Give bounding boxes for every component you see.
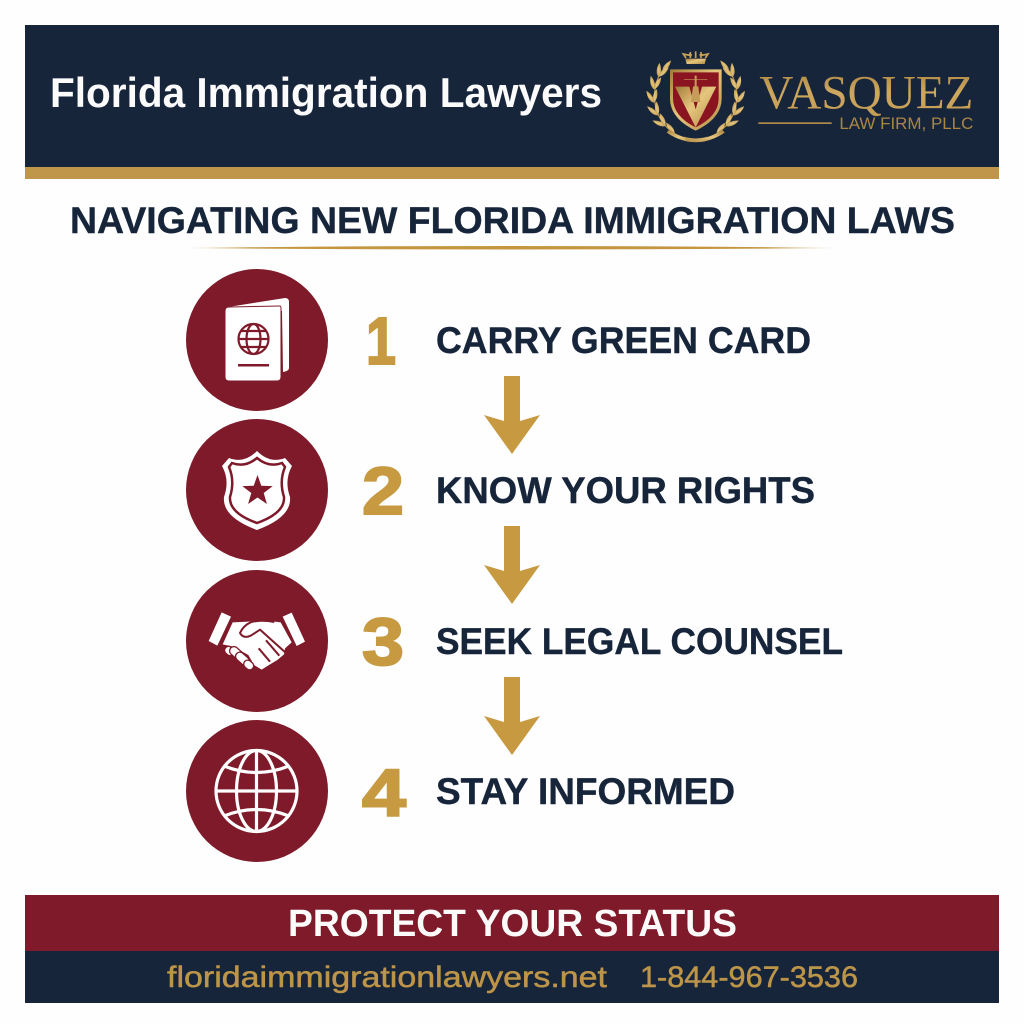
step 3 [186,570,843,712]
step 1 [186,269,811,411]
step number 4: 4 [362,756,406,831]
arrow 2 to 3 [484,526,540,604]
step 4 [186,720,735,862]
icon: handshake [186,570,328,712]
step label 4: STAY INFORMED [436,771,735,812]
icon: globe [186,720,328,862]
logo firm name: VASQUEZ [759,67,973,119]
logo shield [670,69,722,131]
firm logo [645,51,973,142]
header navy band [25,25,999,167]
footer red band [25,895,999,951]
header panel [25,25,999,179]
step label 2: KNOW YOUR RIGHTS [436,470,815,511]
step number 3: 3 [362,605,404,680]
logo subtitle: LAW FIRM, PLLC [839,114,973,133]
arrow 1 to 2 [484,376,540,454]
footer phone: 1-844-967-3536 [640,961,858,994]
step 2 [186,419,815,561]
footer slogan: PROTECT YOUR STATUS [288,903,737,945]
logo crown [683,51,708,64]
footer navy band [25,951,999,1003]
logo wreath [645,59,747,142]
footer panel [25,895,999,1003]
footer website: floridaimmigrationlawyers.net [167,961,608,994]
header gold stripe [25,167,999,179]
arrow 3 to 4 [484,677,540,755]
step label 1: CARRY GREEN CARD [436,320,811,361]
step label 3: SEEK LEGAL COUNSEL [436,621,843,662]
icon: police badge [186,419,328,561]
icon: passport [186,269,328,411]
main heading: NAVIGATING NEW FLORIDA IMMIGRATION LAWS [70,200,955,241]
step number 1: 1 [366,304,396,379]
step number 2: 2 [362,454,404,529]
heading underline [178,246,846,250]
logo rule [758,122,832,124]
header title: Florida Immigration Lawyers [50,69,602,116]
